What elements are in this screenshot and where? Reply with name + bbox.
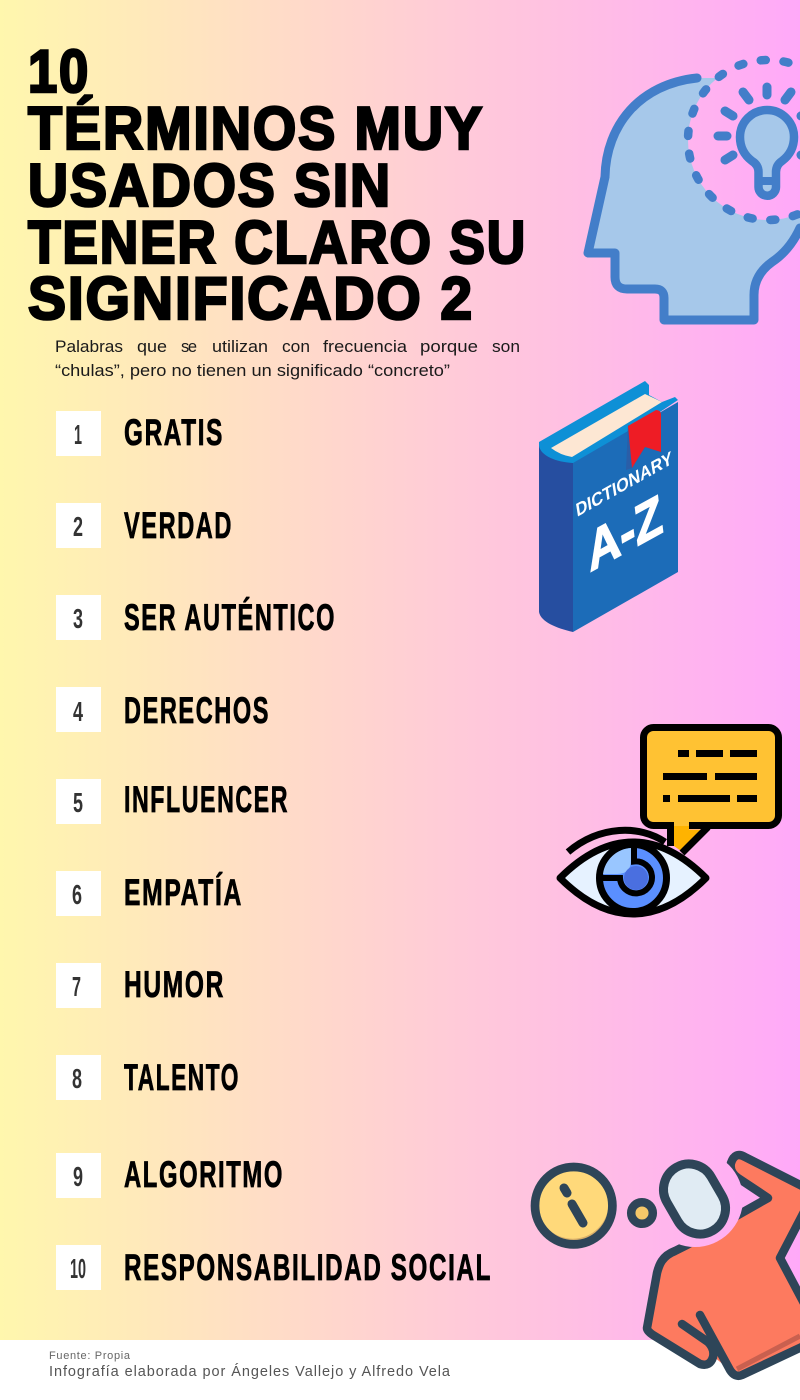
title: SIGNIFICADO 2 <box>28 265 474 332</box>
item 4: DERECHOS <box>124 690 270 731</box>
book label: A-Z <box>584 483 665 584</box>
subtitle: que <box>137 338 167 356</box>
title: TÉRMINOS MUY <box>28 95 484 162</box>
item 1 <box>56 411 224 456</box>
subtitle: porque <box>420 338 478 356</box>
item 9: 9 <box>73 1161 83 1192</box>
item 9: ALGORITMO <box>124 1154 284 1195</box>
item 6: EMPATÍA <box>124 872 243 913</box>
item 3 <box>56 595 336 640</box>
subtitle: se <box>181 338 197 356</box>
item 2: VERDAD <box>124 505 233 546</box>
title: USADOS SIN <box>28 152 392 219</box>
subtitle: frecuencia <box>323 338 408 356</box>
item 3: 3 <box>73 603 83 634</box>
item 3: SER AUTÉNTICO <box>124 597 336 638</box>
info circle <box>535 1167 612 1244</box>
item 6: 6 <box>72 879 82 910</box>
icon: hand with information bubbles <box>535 1151 800 1376</box>
item 7 <box>56 963 225 1008</box>
item 7: 7 <box>72 971 81 1002</box>
list of terms <box>56 411 492 1290</box>
subtitle: son <box>492 338 520 356</box>
capsule bubble <box>653 1152 735 1243</box>
item 7: HUMOR <box>124 964 225 1005</box>
item 2 <box>56 503 233 548</box>
icon: dictionary book <box>539 381 678 632</box>
subtitle: con <box>282 338 310 356</box>
cut-out around capsule <box>647 1151 743 1247</box>
icon: eye with speech bubble <box>560 728 778 914</box>
small dot bubble <box>631 1202 653 1224</box>
footer band <box>0 1340 800 1400</box>
item 2: 2 <box>73 511 83 542</box>
hand <box>647 1155 800 1376</box>
item 4 <box>56 687 270 732</box>
item 10: 10 <box>70 1253 86 1284</box>
subtitle: “chulas”, pero no tienen un significado “concreto” <box>55 362 450 380</box>
subtitle: Palabras <box>55 338 123 356</box>
item 4: 4 <box>73 696 83 727</box>
footer source: Fuente: Propia <box>49 1350 131 1362</box>
item 8: TALENTO <box>124 1057 240 1098</box>
item 10: RESPONSABILIDAD SOCIAL <box>124 1247 492 1288</box>
footer credit: Infografía elaborada por Ángeles Vallejo y Alfredo Vela <box>49 1363 451 1380</box>
item 10 <box>56 1245 492 1290</box>
book label <box>574 448 674 584</box>
letter i glyph <box>564 1188 583 1223</box>
item 5 <box>56 779 289 824</box>
item 5: 5 <box>73 787 83 818</box>
title <box>28 38 527 332</box>
title: 10 <box>28 38 90 105</box>
item 8 <box>56 1055 240 1100</box>
item 8: 8 <box>72 1063 82 1094</box>
book label: DICTIONARY <box>574 448 674 522</box>
item 1: GRATIS <box>124 412 224 453</box>
item 5: INFLUENCER <box>124 779 289 820</box>
title: TENER CLARO SU <box>28 209 527 276</box>
subtitle <box>55 338 520 380</box>
subtitle: utilizan <box>212 338 268 356</box>
item 1: 1 <box>74 419 82 450</box>
icon: head with light bulb <box>588 60 800 320</box>
item 9 <box>56 1153 284 1198</box>
item 6 <box>56 871 243 916</box>
